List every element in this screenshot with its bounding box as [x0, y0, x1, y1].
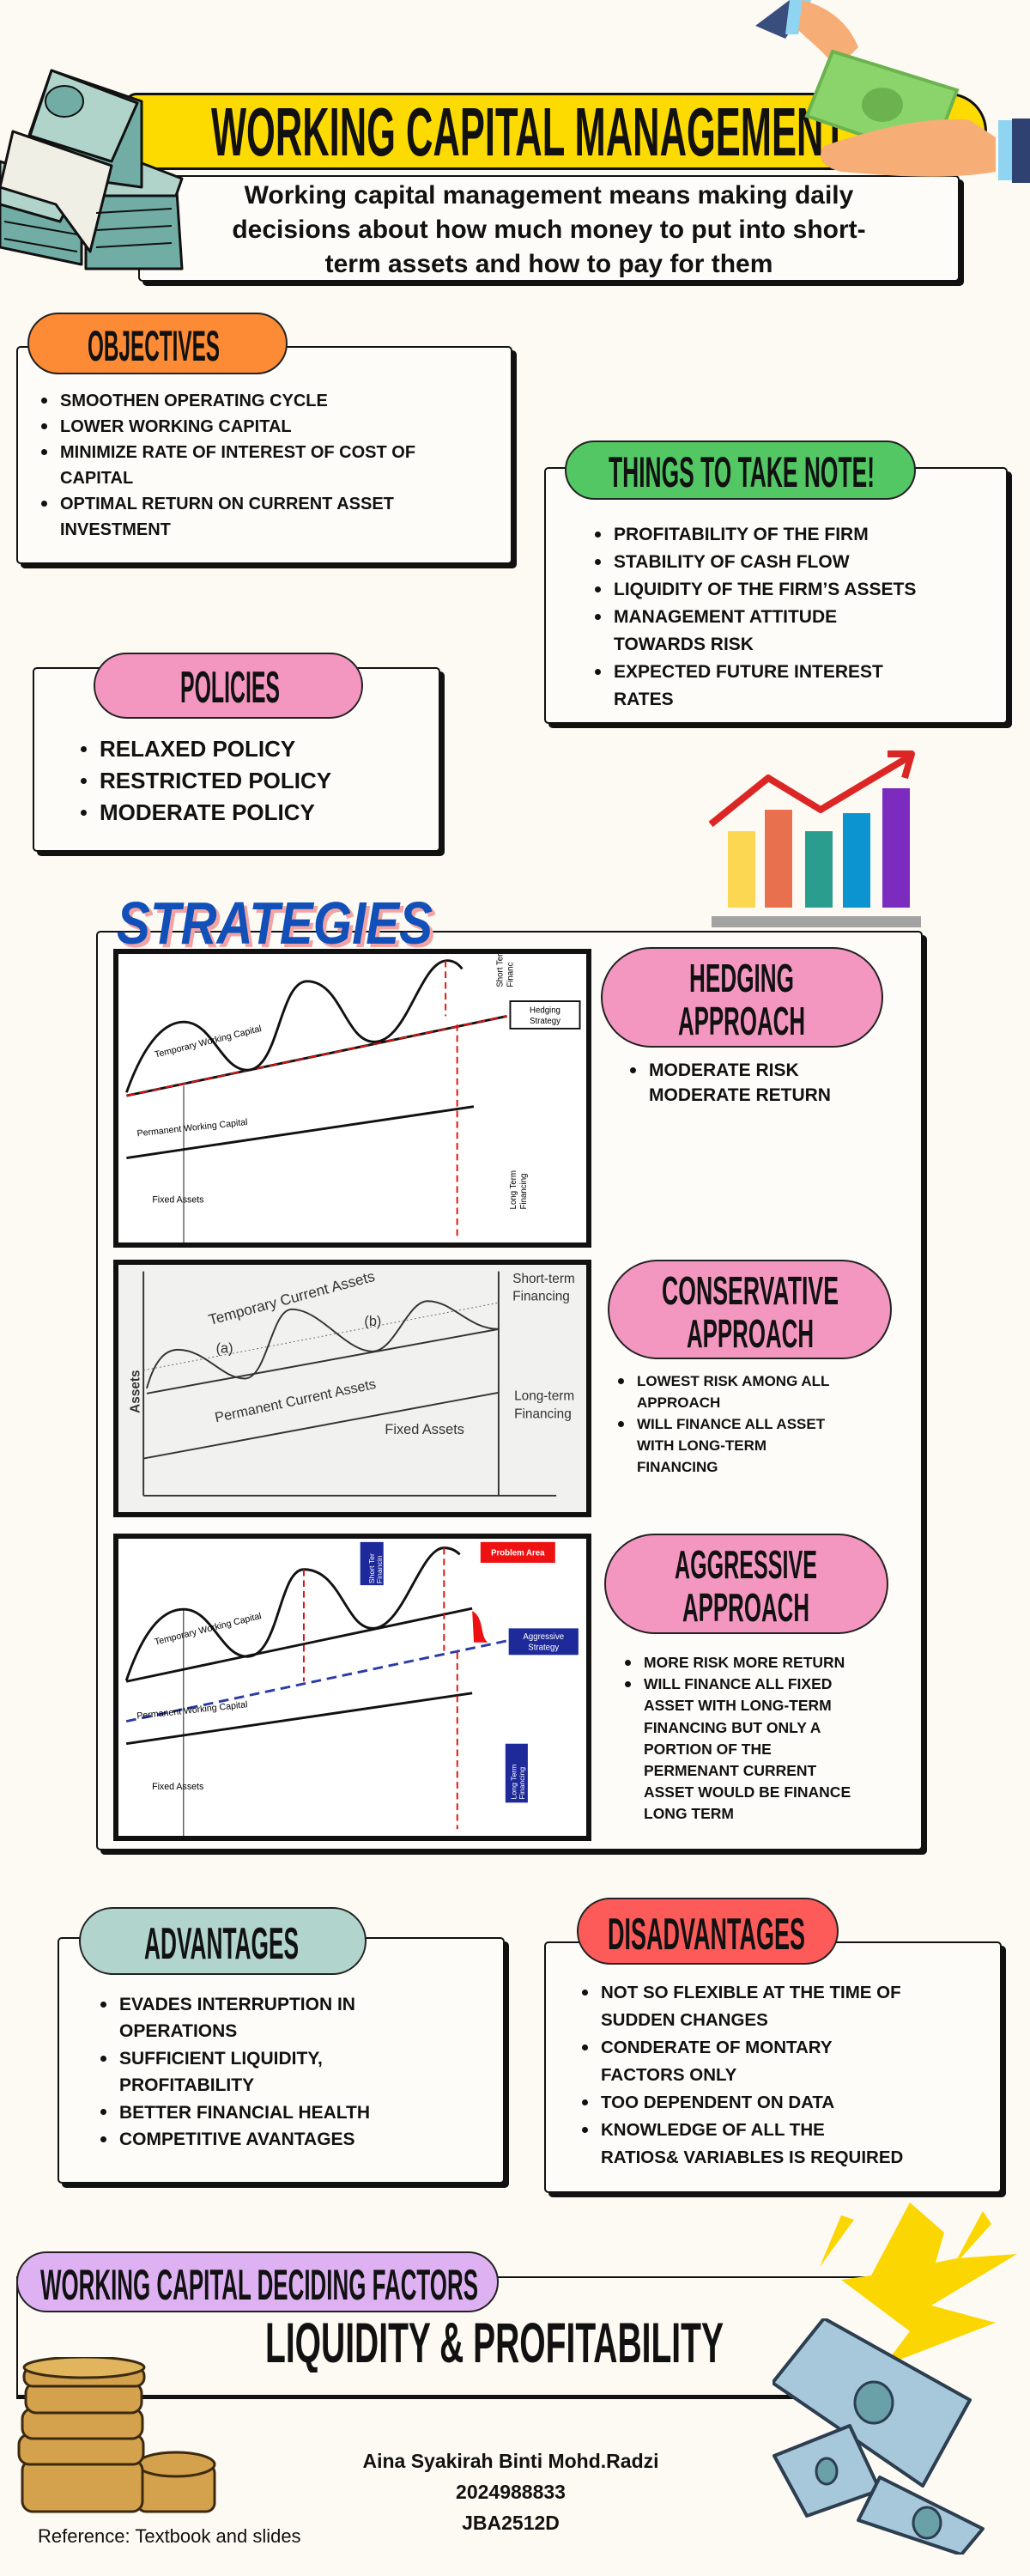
policies list: RESTRICTED POLICY: [100, 768, 331, 793]
chart: hedging: Fixed Assets: [152, 1195, 203, 1206]
heading: disadvantages: [577, 1898, 839, 1965]
chart: aggressive: Long Term: [509, 1765, 518, 1799]
conservative list: FINANCING: [637, 1459, 718, 1475]
disadvantages list: TOO DEPENDENT ON DATA: [601, 2093, 834, 2112]
aggressive list: PERMENANT CURRENT: [644, 1762, 816, 1779]
panel: deciding factors: [16, 2276, 892, 2399]
credits: 2024988833: [456, 2481, 566, 2503]
disadvantages list: NOT SO FLEXIBLE AT THE TIME OF: [601, 1983, 901, 2002]
advantages list: OPERATIONS: [119, 2021, 237, 2041]
things list: PROFITABILITY OF THE FIRM: [614, 525, 869, 544]
reference: Reference: Textbook and slides: [38, 2525, 301, 2547]
heading: things to take note: [565, 440, 916, 500]
chart: hedging: Financing: [519, 1174, 529, 1209]
chart: aggressive: Problem Area: [491, 1548, 545, 1558]
heading: hedging approach: HEDGING: [689, 956, 794, 1000]
panel: disadvantages: [544, 1941, 1002, 2193]
objectives list: SMOOTHEN OPERATING CYCLE: [60, 392, 328, 410]
chart: conservative: Financing: [512, 1289, 570, 1303]
objectives list: MINIMIZE RATE OF INTEREST OF COST OF: [60, 443, 415, 462]
icon: flying bills: [772, 2318, 985, 2555]
conservative list: [618, 1373, 829, 1475]
icon: coin stacks: [17, 2357, 216, 2512]
chart: hedging: Financ: [506, 963, 515, 987]
heading: objectives: [27, 313, 288, 374]
aggressive list: FINANCING BUT ONLY A: [644, 1719, 821, 1736]
objectives list: INVESTMENT: [60, 520, 171, 539]
things list: [595, 525, 916, 709]
credits: Aina Syakirah Binti Mohd.Radzi: [362, 2450, 659, 2472]
description box: [138, 175, 960, 282]
icon: hands with cash: [755, 0, 1030, 183]
chart: conservative: Financing: [514, 1407, 572, 1422]
things list: LIQUIDITY OF THE FIRM’S ASSETS: [614, 580, 916, 599]
description box: Working capital management means making daily: [245, 181, 853, 210]
chart: hedging: Strategy: [530, 1017, 560, 1026]
chart: hedging: Temporary Working Capital: [154, 1024, 263, 1060]
things list: STABILITY OF CASH FLOW: [614, 552, 850, 572]
title bar: [124, 93, 987, 170]
chart: aggressive: Permanent Working Capital: [136, 1699, 248, 1722]
chart: conservative: Long-term: [514, 1388, 574, 1403]
heading: aggressive approach: [604, 1534, 888, 1634]
chart: conservative: Permanent Current Assets: [214, 1376, 378, 1425]
chart: aggressive: Temporary Working Capital: [154, 1611, 263, 1648]
disadvantages list: RATIOS& VARIABLES IS REQUIRED: [601, 2148, 903, 2167]
things list: RATES: [614, 690, 674, 709]
advantages list: COMPETITIVE AVANTAGES: [119, 2129, 355, 2149]
heading: advantages: [79, 1907, 367, 1975]
chart: hedging: [113, 949, 591, 1248]
aggressive list: MORE RISK MORE RETURN: [644, 1654, 845, 1671]
disadvantages list: SUDDEN CHANGES: [601, 2010, 768, 2030]
icon: growth bar chart: [709, 750, 921, 927]
advantages list: BETTER FINANCIAL HEALTH: [119, 2103, 370, 2123]
chart: aggressive: Fixed Assets: [152, 1782, 203, 1792]
things list: EXPECTED FUTURE INTEREST: [614, 662, 883, 682]
objectives list: LOWER WORKING CAPITAL: [60, 417, 292, 436]
advantages list: SUFFICIENT LIQUIDITY,: [119, 2049, 323, 2069]
panel: things to take note: [544, 467, 1008, 724]
heading: hedging approach: [601, 947, 883, 1048]
chart: hedging: Permanent Working Capital: [136, 1117, 248, 1139]
policies list: [81, 736, 331, 825]
chart: conservative: Temporary Current Assets: [207, 1267, 377, 1328]
aggressive list: [625, 1654, 851, 1822]
aggressive list: LONG TERM: [644, 1805, 734, 1822]
things list: TOWARDS RISK: [614, 635, 754, 654]
icon: lightning: [820, 2202, 1017, 2360]
advantages list: EVADES INTERRUPTION IN: [119, 1995, 355, 2014]
disadvantages list: KNOWLEDGE OF ALL THE: [601, 2120, 825, 2140]
hedging list: [630, 1060, 831, 1105]
advantages list: [100, 1995, 370, 2149]
chart: aggressive: Financing: [518, 1767, 526, 1799]
conservative list: APPROACH: [637, 1394, 720, 1411]
chart: conservative: (b): [364, 1314, 381, 1329]
disadvantages list: FACTORS ONLY: [601, 2065, 736, 2085]
chart: aggressive: Short Ter: [367, 1553, 376, 1583]
chart: aggressive: [113, 1534, 591, 1841]
hedging list: MODERATE RETURN: [649, 1085, 831, 1105]
credits: [362, 2450, 659, 2534]
chart: aggressive: Strategy: [528, 1643, 559, 1653]
hedging list: MODERATE RISK: [649, 1060, 799, 1080]
conservative list: LOWEST RISK AMONG ALL: [637, 1373, 829, 1389]
conservative list: WILL FINANCE ALL ASSET: [637, 1416, 825, 1432]
disadvantages list: CONDERATE OF MONTARY: [601, 2038, 833, 2057]
heading: conservative approach: [608, 1260, 892, 1359]
disadvantages list: [582, 1983, 903, 2167]
policies list: MODERATE POLICY: [100, 799, 315, 825]
description box: term assets and how to pay for them: [325, 250, 772, 278]
chart: aggressive: Aggressive: [523, 1632, 564, 1642]
objectives list: OPTIMAL RETURN ON CURRENT ASSET: [60, 495, 394, 513]
chart: aggressive: Financin: [375, 1555, 384, 1583]
description box: decisions about how much money to put into short-: [232, 216, 866, 244]
panel: objectives: [16, 346, 512, 564]
objectives list: [41, 392, 415, 539]
chart: conservative: [113, 1260, 591, 1517]
aggressive list: ASSET WITH LONG-TERM: [644, 1697, 832, 1714]
policies list: RELAXED POLICY: [100, 736, 295, 762]
aggressive list: ASSET WOULD BE FINANCE: [644, 1783, 851, 1801]
chart: conservative: Fixed Assets: [385, 1422, 464, 1437]
things list: MANAGEMENT ATTITUDE: [614, 607, 837, 627]
panel: advantages: [58, 1937, 505, 2184]
panel: strategies: [96, 931, 923, 1850]
chart: conservative: (a): [216, 1341, 233, 1357]
aggressive list: PORTION OF THE: [644, 1741, 772, 1758]
conservative list: WITH LONG-TERM: [637, 1437, 766, 1454]
panel: policies: [33, 667, 440, 852]
chart: conservative: Assets: [128, 1370, 142, 1413]
credits: JBA2512D: [462, 2512, 560, 2534]
objectives list: CAPITAL: [60, 469, 133, 488]
chart: conservative: Short-term: [512, 1272, 575, 1286]
chart: hedging: Long Term: [509, 1170, 518, 1209]
aggressive list: WILL FINANCE ALL FIXED: [644, 1675, 832, 1692]
chart: hedging: Hedging: [530, 1006, 560, 1016]
icon: money stack: [0, 69, 184, 270]
advantages list: PROFITABILITY: [119, 2075, 254, 2095]
heading: policies: [94, 653, 363, 719]
